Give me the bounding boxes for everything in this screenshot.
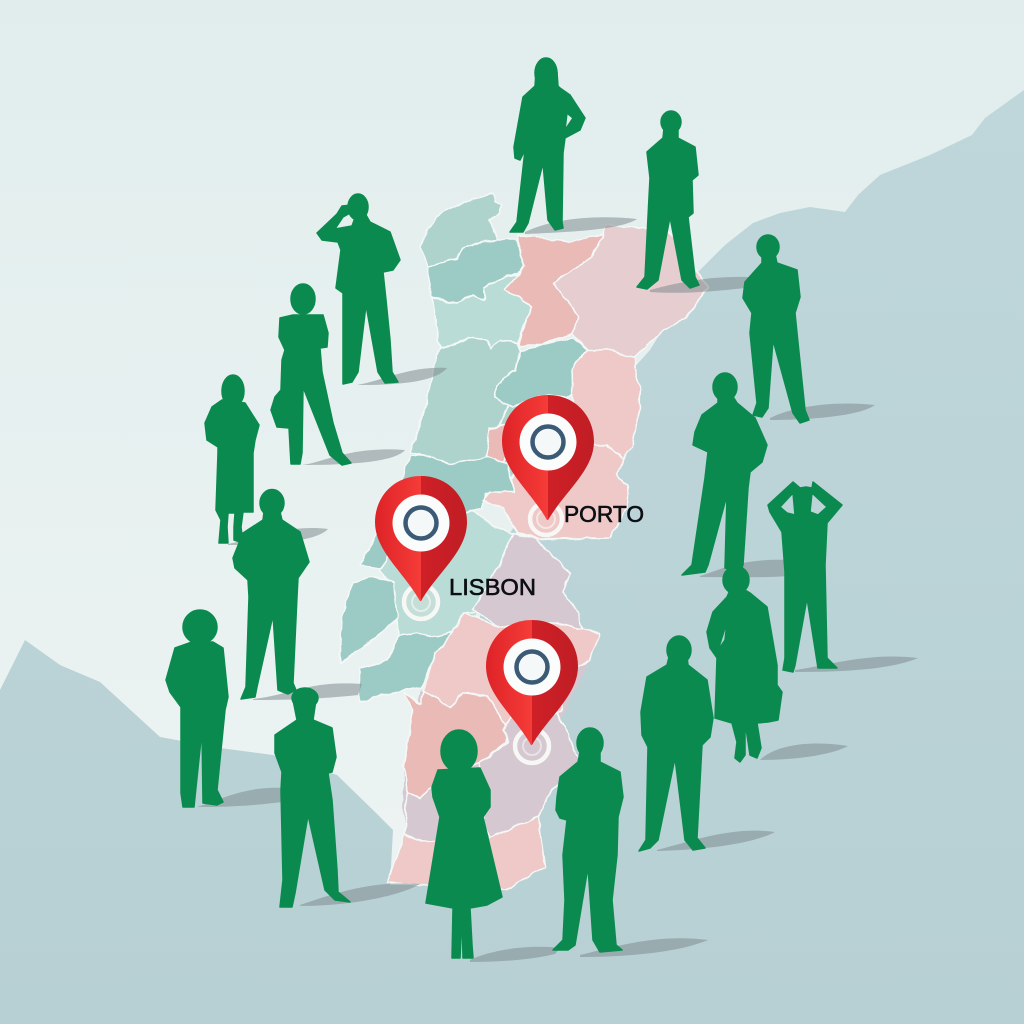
pin target (520, 414, 576, 470)
map pin: Porto (502, 395, 594, 535)
map underlay south (403, 620, 600, 840)
region: Lisbon light green (380, 510, 513, 638)
map pin: south (486, 620, 578, 763)
pin location halo (404, 585, 438, 619)
pin body right (532, 620, 578, 745)
region: far south pink (387, 817, 545, 890)
person: woman in dress with bag (707, 566, 782, 762)
region: north pink (505, 233, 603, 345)
cast shadows beneath figures (197, 217, 918, 962)
person: woman left lower (166, 610, 228, 807)
region: coast green (340, 577, 398, 663)
region: south mauve east (480, 713, 580, 838)
pin target (504, 638, 560, 696)
map pin: Lisbon (375, 476, 467, 619)
region: small pink (486, 425, 512, 466)
map underlay north (410, 370, 600, 495)
region: north green dark (427, 240, 525, 303)
person: woman with bag (271, 284, 351, 465)
pin location halo (515, 729, 549, 763)
map underlay centre (398, 520, 520, 640)
region: northeast mauve (553, 225, 707, 358)
person: man hands on hips (682, 373, 767, 575)
person: man right lower (639, 636, 713, 851)
region: south-west green (360, 633, 453, 702)
person: man top right (637, 111, 699, 289)
person: man with cap (275, 688, 350, 907)
region: centre green (495, 337, 587, 407)
region: central pink (422, 613, 600, 727)
pin body right (421, 476, 467, 601)
label: Lisbon: LISBON (449, 574, 536, 600)
person: woman top centre (510, 58, 585, 232)
pin body left (502, 395, 548, 520)
pin body left (375, 476, 421, 601)
person: figure with hands on head (768, 482, 842, 672)
label: Porto: PORTO (564, 501, 644, 527)
pin target (392, 494, 450, 552)
region: light green (432, 275, 532, 348)
region: west green dark (360, 455, 515, 570)
pin location halo (530, 503, 562, 535)
person: woman left upper (205, 375, 259, 543)
person: man left middle (233, 490, 309, 699)
region: central mauve (473, 533, 583, 640)
region: large green (410, 338, 520, 465)
region: south-west pink (403, 690, 507, 797)
person: woman in dress bottom (426, 730, 502, 958)
person: saluting man (317, 194, 400, 384)
map of Portugal regions (340, 194, 707, 890)
pin body right (548, 395, 594, 520)
region: east pink (572, 350, 640, 458)
region: northwest green (420, 194, 503, 267)
person: man right upper (743, 235, 809, 423)
region: Porto pink (483, 440, 628, 540)
person: man bottom centre (553, 728, 623, 952)
region: south mauve west (405, 763, 487, 842)
pin body left (486, 620, 532, 745)
